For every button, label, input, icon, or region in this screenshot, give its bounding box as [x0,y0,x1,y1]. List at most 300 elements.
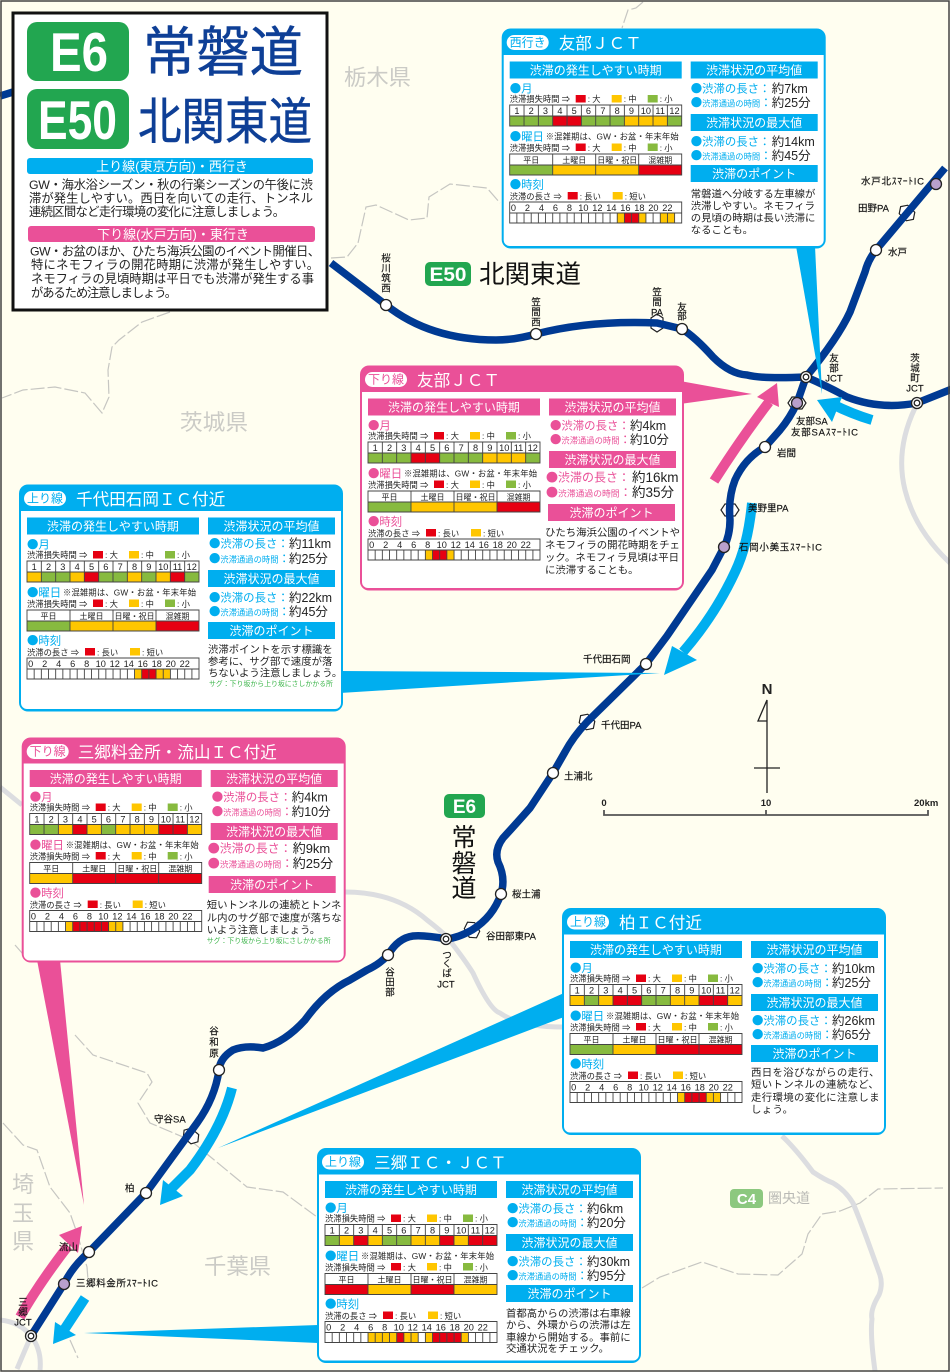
station: Misato JCT: 三 [18,1298,28,1308]
heading: point [208,622,335,639]
stats: maximums: ●渋滞通過の時間： [546,484,632,500]
stats: averages [752,960,875,990]
chart: by month: 4 [618,985,623,995]
heading: point [506,1285,633,1302]
badge: direction: 上り線 [325,1153,361,1170]
stats: averages: 約25分 [772,95,811,110]
chart: by weekday: ※混雑期は、GW・お盆・年末年始 [361,1251,495,1261]
station: Kasama PA [651,286,664,318]
panel title: 三郷料金所・流山ＩＣ付近 [78,743,277,762]
text: point [208,643,342,680]
chart: by month [368,418,540,463]
station: Tomobe: 友 [677,302,687,314]
chart: by hour: 6 [613,1082,618,1092]
chart: by month: : 中 [624,94,637,104]
chart: by month: 5 [89,562,94,572]
chart: by month: : 大 [105,550,118,560]
chart: by hour: : 長い [395,1311,416,1321]
panel: Chiyoda-Ishioka IC [19,484,343,712]
heading: point: 渋滞のポイント [527,1286,612,1301]
chart: by weekday: 土曜日 [80,611,104,621]
chart: by month: 渋滞損失時間 ⇒ [325,1214,386,1224]
text: point: ル内のサグ部で速度が落ちな [207,912,342,924]
station: Sakuragawa-Chikusei: 筑 [381,272,391,284]
stats: averages: ●渋滞通過の時間： [209,550,290,566]
chart: by month: 2 [387,443,392,453]
heading: congestion period [325,1181,497,1198]
badge: direction: 上り線 [570,913,606,930]
chart: by hour: 22 [180,659,190,669]
text: point: 西日を浴びながらの走行、 [751,1066,880,1079]
station: Sakuragawa-Chikusei: 西 [381,284,391,294]
chart: by month: 1 [330,1225,335,1235]
panel title: 千代田石岡ＩＣ付近 [76,490,225,509]
chart: by month: : 中 [684,974,697,984]
chart: by weekday: 日曜・祝日 [114,611,154,621]
chart: by hour: 0 [28,659,33,669]
chart: by hour [27,632,199,679]
text: down line: GW・お盆のほか、ひたち海浜公園のイベント開催日、 [30,244,320,258]
chart: by month: 11 [514,443,523,453]
heading: point: 渋滞のポイント [230,877,314,892]
chart: by month: : 中 [439,1214,452,1224]
scale bar: 10 [761,798,771,809]
chart: by month [510,80,682,126]
chart: by hour: 8 [627,1082,632,1092]
text: point: ック。ネモフィラ見頃は平日 [545,552,679,564]
chart: by month: 7 [120,814,125,824]
chart: by hour: 2 [42,659,47,669]
station: Yawara [209,1026,224,1076]
chart: by hour: ●時刻 [570,1056,604,1072]
prefecture label: Saitama: 埼 [12,1172,34,1197]
prefecture label: Saitama [12,1172,34,1254]
heading: congestion period: 渋滞の発生しやすい時期 [388,399,520,414]
stats: averages: ●渋滞通過の時間： [507,1214,588,1230]
chart: by hour: 6 [553,203,558,213]
stats: maximums: 約45分 [772,148,811,163]
heading: maximums: 渋滞状況の最大値 [706,115,802,130]
chart: by hour: 6 [70,659,75,669]
prefecture label: Saitama: 玉 [12,1201,34,1226]
chart: by hour: 渋滞の長さ ⇒ [27,648,80,658]
station: Yawara: 谷 [209,1026,219,1038]
heading: point: 渋滞のポイント [712,166,796,181]
station: Kashiwa: 柏 [125,1182,135,1194]
heading: congestion period [30,770,202,787]
chart: by month: 10 [456,1225,466,1235]
chart: by month: 10 [161,814,171,824]
chart: by hour [510,176,682,223]
heading: point: 渋滞のポイント [229,623,314,638]
chart: by hour: 10 [394,1322,404,1332]
panel: east Tomobe JCT [360,366,684,590]
chart: by month: : 大 [403,1214,416,1224]
chart: by weekday: : 小 [475,1262,489,1272]
chart: by hour: 6 [411,540,416,550]
station: Sakuragawa-Chikusei [380,252,392,310]
stats: averages: 約10km [832,961,875,976]
station: Kasama-Nishi [530,296,542,340]
chart: by hour: 14 [124,659,134,669]
text: point: 短いトンネルの連続など、 [751,1078,879,1091]
chart: by month: 6 [401,1225,406,1235]
chart: by month: ●月 [325,1200,348,1216]
chart: by month: 10 [158,562,168,572]
station: Tomobe [676,302,688,334]
text: point: ネモフィラの開花時期をチェ [545,539,680,552]
chart: by weekday: 渋滞損失時間 ⇒ [325,1262,386,1272]
note: sag definition: サグ：下り坂から上り坂にさしかかる所 [207,936,331,945]
expressway: C4 Ken-O [0,408,950,1371]
chart: by month: 2 [46,562,51,572]
scale bar [601,798,938,815]
chart: by hour: 18 [695,1082,705,1092]
chart: by weekday: 平日 [523,156,539,165]
arrow: eastbound to Tomobe [714,383,779,481]
station: Misato JCT: JCT [14,1318,32,1328]
chart: by weekday: : 中 [141,599,154,609]
text: point: 短いトンネルの連続とトンネ [207,898,341,912]
chart: by month: 12 [187,562,197,572]
text: point: いよう注意しましょう。 [207,924,320,936]
chart: by month: ●月 [368,418,391,434]
stats: averages [550,418,669,448]
stats: averages: 約25分 [289,551,328,566]
text: point: 渋滞ポイントを示す標識を [208,643,333,656]
chart: by month [30,789,202,834]
station: Mito-Kita smart IC: 水戸北ｽﾏｰﾄIC [861,176,924,188]
stats: maximums: ●渋滞通過の時間： [752,1026,833,1042]
chart: by month: : 中 [482,431,495,441]
chart: by weekday [30,837,202,884]
chart: by weekday: ●曜日 [325,1248,359,1264]
chart: by hour: : 短い [625,192,646,202]
panel: west Tomobe JCT [502,28,826,248]
stats: maximums: ●渋滞通過の時間： [209,604,290,620]
chart: by hour: 0 [511,203,516,213]
heading: point [691,165,818,182]
title: Kita-Kanto: 北関東道 [138,94,312,150]
station: Ibaraki-machi JCT: 町 [910,374,920,384]
chart: by month: 4 [373,1225,378,1235]
chart: by hour: ●時刻 [368,514,402,530]
chart: by weekday: ※混雑期は、GW・お盆・年末年始 [546,132,679,142]
station: Tsukuba JCT: つ [442,950,452,962]
label: C4 Ken-O road: C4 [737,1191,757,1208]
station: Mito [870,244,907,258]
chart: by month: 5 [92,814,97,824]
text: point: 走行環境の変化に注意しま [751,1091,880,1104]
chart: by hour: 2 [585,1082,590,1092]
prefecture label: Saitama: 県 [12,1229,34,1254]
heading: averages [211,770,338,787]
chart: by hour: 16 [138,659,148,669]
chart: by hour [570,1056,742,1102]
badge: direction: 下り線 [368,370,404,388]
chart: by hour: 18 [154,911,165,921]
chart: by hour: 渋滞の長さ ⇒ [325,1311,378,1321]
chart: by hour: : 短い [685,1071,706,1081]
chart: by hour: 8 [87,911,92,921]
chart: by weekday: 平日 [382,493,398,502]
stats: maximums [691,134,815,164]
heading: maximums: 渋滞状況の最大値 [521,1235,618,1250]
north arrow: N [762,681,772,698]
panel: Kashiwa IC [562,908,886,1135]
chart: by hour: 20 [168,911,179,921]
heading: maximums [211,823,338,840]
chart: by weekday: 日曜・祝日 [412,1274,452,1284]
chart: by hour: 0 [369,540,374,550]
stats: averages: ●渋滞の長さ： [212,789,291,805]
panel title: 友部ＪＣＴ [559,34,642,53]
chart: by hour: 4 [539,203,544,213]
text: up line: 滞が発生しやすい。西日を向いての走行、トンネル [29,190,313,206]
chart: by hour: 22 [478,1322,488,1332]
route label: E6 Joban: 道 [451,875,477,903]
chart: by weekday [368,466,540,512]
chart: by hour: 8 [425,540,430,550]
chart: by weekday: : 中 [684,1022,697,1032]
label: C4 Ken-O road [730,1189,810,1208]
note: sag definition: サグ：下り坂から上り坂にさしかかる所 [209,679,333,688]
station: Sakura-Tsuchiura [496,888,541,900]
stats: averages: 約4km [630,418,666,433]
stats: averages: ●渋滞通過の時間： [212,804,293,820]
station: Tsuchiura-Kita: 土浦北 [564,770,593,782]
chart: by hour: 渋滞の長さ ⇒ [510,192,562,202]
heading: averages: 渋滞状況の平均値 [226,771,322,786]
station: Tomobe SA: 友部SAｽﾏｰﾄIC [791,426,858,438]
heading: point [751,1045,878,1062]
text: down line: 特にネモフィラの開花時期に渋滞が発生しやすい。 [31,257,319,272]
heading: congestion period: 渋滞の発生しやすい時期 [345,1182,477,1197]
heading: congestion period: 渋滞の発生しやすい時期 [50,771,182,786]
stats: averages: 約10分 [630,432,669,447]
station: Tsuchiura-Kita [548,768,593,782]
chart: by hour: 渋滞の長さ ⇒ [368,528,421,538]
panel: Misato IC and JCT [317,1148,641,1363]
chart: by hour: 20 [648,203,659,213]
text: down line: があるため注意しましょう。 [31,285,177,300]
station: Minori PA: 美野里PA [748,502,789,514]
chart: by month: 3 [358,1225,363,1235]
chart: by weekday: : 大 [648,1022,661,1032]
chart: by month: 12 [528,443,538,453]
chart: by month: 11 [175,814,185,824]
chart: by month: 7 [416,1225,421,1235]
chart: by hour: 6 [368,1322,373,1332]
chart: by month: 10 [641,106,651,116]
text: point: 渋滞しやすい。ネモフィラ [691,200,815,212]
callout pointer: west Tomobe [796,246,822,394]
chart: by hour: 4 [56,659,61,669]
chart: by month [570,960,742,1006]
station: Yatabe-Higashi PA: 谷田部東PA [486,930,537,942]
text: point: しょう。 [751,1104,793,1116]
chart: by weekday: 渋滞損失時間 ⇒ [27,599,88,609]
heading: up line [27,158,313,174]
route label: E50 Kita-Kanto: E50 [430,265,466,286]
stats: maximums: ●渋滞通過の時間： [691,148,772,164]
chart: by weekday: : 小 [180,852,193,862]
station: Ibaraki-machi JCT [906,354,924,408]
chart: by month: 12 [485,1225,495,1235]
chart: by month: 渋滞損失時間 ⇒ [510,94,571,104]
chart: by month: : 小 [660,94,673,104]
chart: by month: 渋滞損失時間 ⇒ [368,431,429,441]
chart: by weekday: ●曜日 [27,584,61,600]
heading: averages [691,62,818,78]
chart: by weekday: : 小 [720,1022,734,1032]
station: Misato toll smart IC: 三郷料金所ｽﾏｰﾄIC [76,1278,158,1290]
chart: by month: 10 [499,443,509,453]
chart: by hour: 8 [84,659,89,669]
stats: averages: 約10分 [292,804,331,819]
stats: maximums: 約95分 [587,1268,626,1283]
chart: by weekday: 渋滞損失時間 ⇒ [570,1022,631,1032]
station: Ibaraki-machi JCT: JCT [906,384,924,394]
chart: by hour: 10 [578,203,589,213]
station: Iwama [760,442,796,460]
chart: by month: 9 [444,1225,449,1235]
chart: by hour: 14 [667,1082,677,1092]
chart: by weekday [510,128,682,175]
chart: by hour: 14 [465,540,475,550]
chart: by month: 6 [106,814,111,824]
chart: by weekday: 平日 [584,1035,600,1044]
heading: averages [751,941,878,958]
chart: by weekday [570,1008,742,1054]
chart: by hour: : 長い [97,648,118,658]
heading: maximums [506,1234,633,1251]
stats: averages [212,789,331,820]
chart: by hour: 10 [639,1082,649,1092]
chart: by month: 8 [473,443,478,453]
chart: by weekday: : 大 [588,143,601,153]
text: point: 首都高からの渋滞は右車線 [506,1307,631,1320]
chart: by hour: 18 [634,203,645,213]
badge: E6: E6 [50,21,108,83]
chart: by month: 5 [572,106,577,116]
stats: averages: 約6km [587,1201,623,1216]
stats: maximums [546,468,679,500]
chart: by weekday: ※混雑期は、GW・お盆・年末年始 [606,1011,740,1021]
stats: maximums: 約35分 [632,485,675,500]
chart: by month: 7 [459,443,464,453]
chart: by hour: 18 [493,540,503,550]
text: point [691,188,816,236]
chart: by weekday: 土曜日 [378,1274,402,1284]
station: Ishioka-Omitama smart IC: 石岡小美玉ｽﾏｰﾄIC [739,542,822,554]
text: down line [30,244,320,300]
chart: by month: 9 [629,106,634,116]
chart: by month: 2 [49,814,54,824]
station: Tomobe: 部 [677,312,687,322]
text: point: 車線から開始する。事前に [506,1331,631,1344]
chart: by hour: 22 [662,203,673,213]
arrow: westbound from Ibaraki-machi [817,397,872,422]
chart: by month: : 中 [144,802,157,812]
chart: by month: 4 [75,562,80,572]
chart: by month: 6 [646,985,651,995]
chart: by weekday [27,584,199,631]
chart: by hour: 4 [354,1322,359,1332]
station: Tomobe JCT: 部 [829,364,839,374]
chart: by hour: 20 [507,540,517,550]
text: point [207,898,342,936]
stats: averages [691,80,811,110]
chart: by hour: 12 [451,540,461,550]
station: Kasama-Nishi: 間 [531,308,541,318]
chart: by month: 7 [661,985,666,995]
chart: by hour: 14 [126,911,137,921]
chart: by hour: 0 [326,1322,331,1332]
chart: by hour: 10 [96,659,106,669]
text: point: ちないよう注意しましょう。 [208,666,342,680]
heading: averages [549,398,676,416]
chart: by month: 11 [655,106,665,116]
chart: by month: 6 [586,106,591,116]
chart: by weekday: : 中 [439,1262,452,1272]
stats: maximums: 約65分 [832,1027,871,1042]
chart: by weekday: 渋滞損失時間 ⇒ [368,480,429,490]
station: Sakuragawa-Chikusei: 川 [381,264,391,274]
text: up line: GW・海水浴シーズン・秋の行楽シーズンの午後に渋 [29,177,313,192]
stats: maximums [752,1012,875,1042]
chart: by month [325,1200,497,1246]
text: point: 交通状況をチェック。 [506,1342,609,1355]
chart: by weekday: 混雑期 [648,155,672,165]
chart: by weekday [325,1248,497,1294]
chart: by weekday: 日曜・祝日 [117,863,157,873]
arrow: southbound to Chiyoda-Ishioka [664,503,752,675]
stats: maximums: ●渋滞の長さ： [209,590,289,606]
chart: by weekday: ※混雑期は、GW・お盆・年末年始 [63,588,197,598]
chart: by month: ●月 [27,536,50,552]
chart: by hour: : 長い [438,528,459,538]
chart: by hour: 16 [436,1322,446,1332]
stats: maximums [507,1254,630,1284]
chart: by month: 3 [543,106,548,116]
stats: maximums: 約25分 [293,856,333,871]
heading: congestion period [510,62,682,78]
chart: by hour [368,514,540,560]
chart: by month: 1 [34,814,39,824]
stats: averages [209,536,331,566]
stats: averages: ●渋滞の長さ： [507,1200,587,1216]
stats: averages: 約4km [292,789,328,804]
stats: maximums: 約9km [293,841,330,856]
chart: by hour [30,885,202,932]
chart: by hour: 10 [98,911,109,921]
chart: by weekday: : 小 [518,480,532,490]
station: Tomobe JCT [800,352,843,384]
station: Chiyoda-Ishioka: 千代田石岡 [583,654,631,666]
chart: by hour: 4 [397,540,402,550]
chart: by month: 4 [77,814,82,824]
label: C4 Ken-O road: 圏央道 [768,1190,810,1206]
arrow: southbound to Misato [53,1298,85,1344]
parking area hexagons [180,202,918,1146]
route label: E6 Joban [444,794,485,903]
station: Tomobe SA: 友部SA [796,416,828,428]
station: Ibaraki-machi JCT: 城 [910,364,920,374]
heading: congestion period: 渋滞の発生しやすい時期 [530,62,662,77]
chart: by weekday: ●曜日 [570,1008,604,1024]
chart: by weekday: 混雑期 [708,1034,732,1044]
